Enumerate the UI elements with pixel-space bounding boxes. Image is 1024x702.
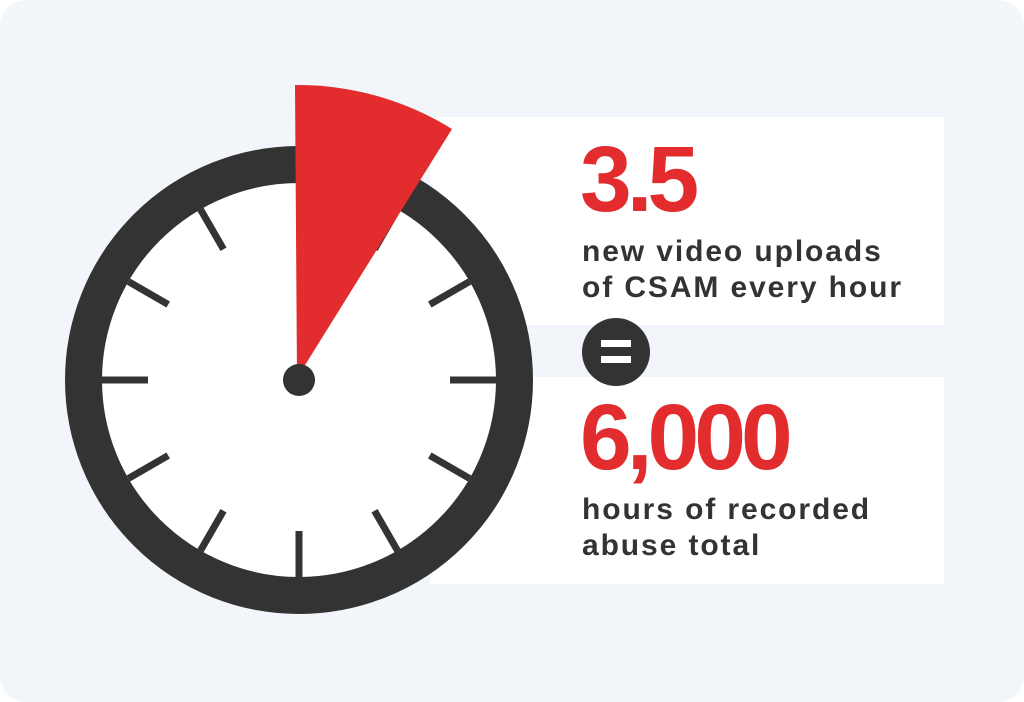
panel: bottom stat box xyxy=(430,377,944,584)
text: new video uploads: new video uploads xyxy=(582,235,883,268)
stat number: 6,000: 6,000 xyxy=(580,385,788,489)
text: hours of recorded abuse: hours of recorded xyxy=(582,493,871,526)
text: new video uploads: of CSAM every hour xyxy=(582,271,903,304)
icon: equals sign xyxy=(582,318,650,386)
text: hours of recorded abuse: abuse total xyxy=(582,529,761,562)
stat number: 3.5: 3.5 xyxy=(580,127,694,231)
text: hours of recorded abuse xyxy=(582,493,871,562)
panel: top stat box xyxy=(430,117,944,325)
text: new video uploads xyxy=(582,235,903,304)
